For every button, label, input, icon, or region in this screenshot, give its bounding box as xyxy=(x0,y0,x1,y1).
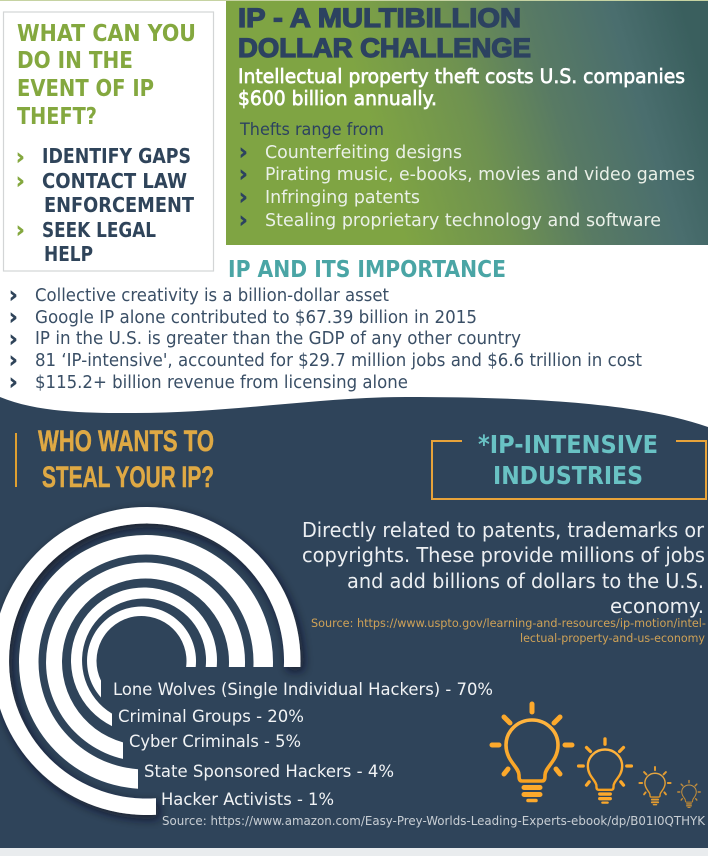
list: importance facts: › xyxy=(9,327,18,351)
thefts list: Stealing proprietary technology and software xyxy=(265,210,661,231)
heading: IP and its importance: IP AND ITS IMPORTANCE xyxy=(228,257,506,283)
banner title: IP - A MULTIBILLION xyxy=(238,3,521,33)
heading: what can you do in the event of IP theft xyxy=(17,21,196,130)
chart labels: Lone Wolves (Single Individual Hackers) - 70% xyxy=(113,680,493,700)
chart labels xyxy=(113,680,493,810)
banner title: DOLLAR CHALLENGE xyxy=(238,33,531,63)
text block: IP-intensive description xyxy=(302,518,705,618)
text block: IP-intensive description: and add billions of dollars to the U.S. xyxy=(347,569,704,593)
source: USPTO xyxy=(311,616,706,645)
list: importance facts: › xyxy=(9,305,18,329)
banner subtitle: Intellectual property theft costs U.S. companies xyxy=(238,65,685,88)
text block: IP-intensive description: Directly related to patents, trademarks or xyxy=(302,518,705,542)
list: actions: CONTACT LAW xyxy=(42,169,187,193)
list: importance facts: Collective creativity is a billion-dollar asset xyxy=(35,286,389,306)
heading: who wants to steal your IP xyxy=(15,425,214,494)
panel: IP-intensive industries heading xyxy=(432,430,706,499)
thefts list: Infringing patents xyxy=(265,187,420,208)
chart labels: Hacker Activists - 1% xyxy=(161,790,334,810)
list: importance facts: › xyxy=(9,348,18,372)
chart labels: Criminal Groups - 20% xyxy=(118,707,304,727)
heading: what can you do in the event of IP theft: EVENT OF IP xyxy=(17,76,154,102)
list: actions: › xyxy=(16,218,25,242)
heading: what can you do in the event of IP theft: WHAT CAN YOU xyxy=(17,21,196,47)
panel: IP-intensive industries heading: INDUSTRIES xyxy=(493,461,643,490)
list: importance facts: › xyxy=(9,370,18,394)
heading: what can you do in the event of IP theft: DO IN THE xyxy=(17,48,133,74)
list: importance facts: $115.2+ billion revenue from licensing alone xyxy=(35,373,408,393)
list: actions: IDENTIFY GAPS xyxy=(42,144,191,168)
heading: who wants to steal your IP: STEAL YOUR IP? xyxy=(42,461,214,494)
arc: state sponsored hackers xyxy=(71,587,217,726)
banner subtitle xyxy=(238,65,685,110)
thefts list: › xyxy=(239,162,248,186)
thefts list xyxy=(239,140,695,232)
icon: light bulbs xyxy=(492,704,700,808)
list: importance facts: Google IP alone contributed to $67.39 billion in 2015 xyxy=(35,308,477,328)
chart labels: Cyber Criminals - 5% xyxy=(129,732,301,752)
heading: who wants to steal your IP: WHO WANTS TO xyxy=(38,425,214,458)
arc: lone wolves xyxy=(0,507,301,815)
panel: navy wave section xyxy=(0,397,708,848)
list: actions: › xyxy=(16,169,25,193)
arc: cyber criminals xyxy=(46,562,245,759)
arc: criminal groups xyxy=(19,535,273,789)
panel: multibillion dollar challenge banner xyxy=(226,1,708,245)
thefts list: Counterfeiting designs xyxy=(265,142,462,163)
list: importance facts: › xyxy=(9,283,18,307)
footer strip xyxy=(0,848,708,856)
list: actions: › xyxy=(16,145,25,169)
source: Amazon: Source: https://www.amazon.com/Easy-Prey-Worlds-Leading-Experts-ebook/dp/B01I0QTHYK xyxy=(162,814,706,828)
list: actions: SEEK LEGAL xyxy=(42,218,156,242)
banner subtitle: $600 billion annually. xyxy=(238,87,437,110)
source: USPTO: lectual-property-and-us-economy xyxy=(520,631,705,645)
source: USPTO: Source: https://www.uspto.gov/learning-and-resources/ip-motion/intel- xyxy=(311,616,706,630)
list: importance facts xyxy=(9,283,642,394)
thefts list: › xyxy=(239,208,248,232)
list: importance facts: IP in the U.S. is greater than the GDP of any other country xyxy=(35,329,521,349)
heading: what can you do in the event of IP theft: THEFT? xyxy=(17,104,97,130)
chart: concentric hacker share arcs xyxy=(0,507,301,815)
thefts list: › xyxy=(239,140,248,164)
thefts list: Pirating music, e-books, movies and video games xyxy=(265,164,695,185)
panel: IP-intensive industries heading: *IP-INTENSIVE xyxy=(478,430,658,459)
panel: what can you do xyxy=(4,12,214,271)
list: importance facts: 81 ‘IP-intensive', accounted for $29.7 million jobs and $6.6 trillion in cost xyxy=(35,351,642,371)
thefts intro: Thefts range from xyxy=(239,120,384,139)
list: actions xyxy=(16,144,194,266)
arc: hacker activists xyxy=(87,607,196,698)
text block: IP-intensive description: copyrights. These provide millions of jobs xyxy=(302,543,705,567)
chart labels: State Sponsored Hackers - 4% xyxy=(144,762,394,782)
thefts list: › xyxy=(239,185,248,209)
banner title xyxy=(238,3,531,63)
list: actions: ENFORCEMENT xyxy=(44,193,194,217)
list: actions: HELP xyxy=(44,242,93,266)
text block: IP-intensive description: economy. xyxy=(610,594,704,618)
